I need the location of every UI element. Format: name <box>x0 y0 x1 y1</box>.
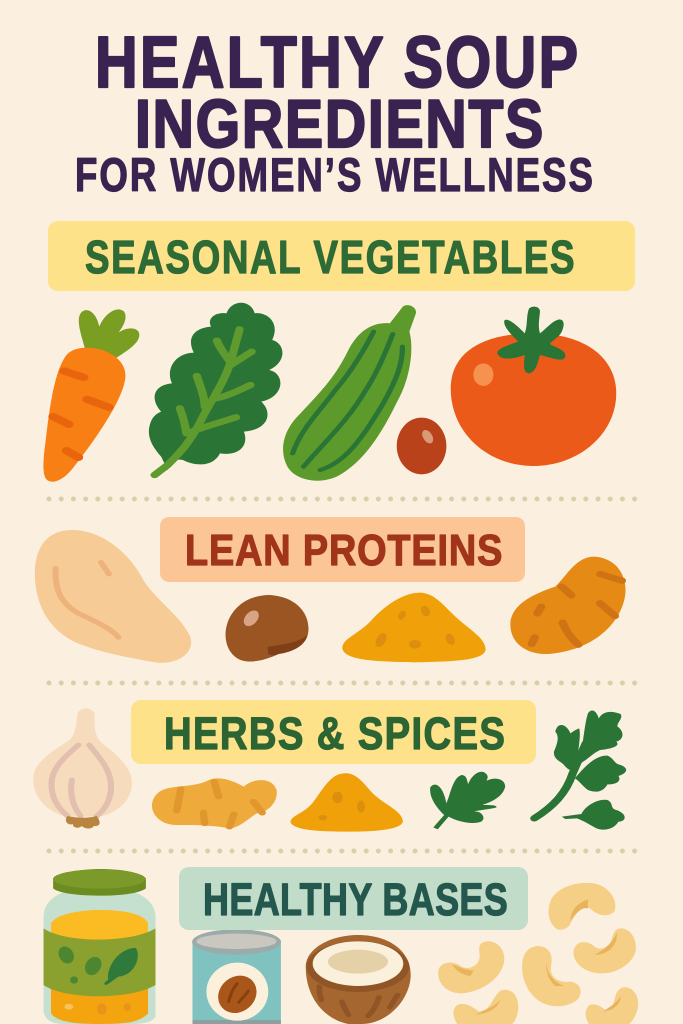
icon: bean <box>226 595 308 661</box>
icon: cashews <box>438 883 638 1024</box>
heading: healthy bases: HEALTHY BASES <box>203 874 508 925</box>
title: INGREDIENTS <box>135 86 543 162</box>
icon: sweet potato <box>510 557 626 654</box>
heading: lean proteins <box>160 517 525 582</box>
heading: seasonal vegetables: SEASONAL VEGETABLES <box>85 231 575 283</box>
panel: herbs and spices illustrations <box>33 708 626 832</box>
icon: garlic <box>33 708 132 828</box>
icon: vegetable broth jar <box>44 869 155 1024</box>
icon: coconut half <box>306 935 411 1024</box>
panel: lean proteins illustrations <box>35 530 626 663</box>
icon: turmeric mound <box>290 773 403 832</box>
icon: zucchini <box>283 305 416 481</box>
title: HEALTHY SOUP <box>95 21 578 102</box>
icon: carrot <box>43 309 139 482</box>
title: FOR WOMEN’S WELLNESS <box>75 149 593 201</box>
icon: tomato <box>451 307 616 466</box>
icon: canned coconut milk <box>192 929 281 1024</box>
dotted divider row two <box>49 680 636 686</box>
icon: lentil mound <box>342 593 486 662</box>
dotted divider row one <box>49 496 636 502</box>
title <box>75 21 593 201</box>
heading: seasonal vegetables <box>48 221 635 291</box>
panel: healthy bases illustrations <box>44 869 638 1024</box>
dotted divider row three <box>49 848 636 854</box>
heading: herbs and spices <box>131 700 536 764</box>
icon: cherry tomato <box>397 418 446 474</box>
icon: kale leaf <box>149 303 282 475</box>
icon: chicken breast <box>35 530 191 663</box>
icon: herb leaf <box>430 772 505 829</box>
icon: parsley sprig <box>534 710 626 830</box>
heading: herbs and spices: HERBS & SPICES <box>164 708 505 759</box>
heading: lean proteins: LEAN PROTEINS <box>185 525 502 575</box>
icon: ginger root <box>152 778 277 828</box>
panel: seasonal vegetables illustrations <box>43 303 616 482</box>
